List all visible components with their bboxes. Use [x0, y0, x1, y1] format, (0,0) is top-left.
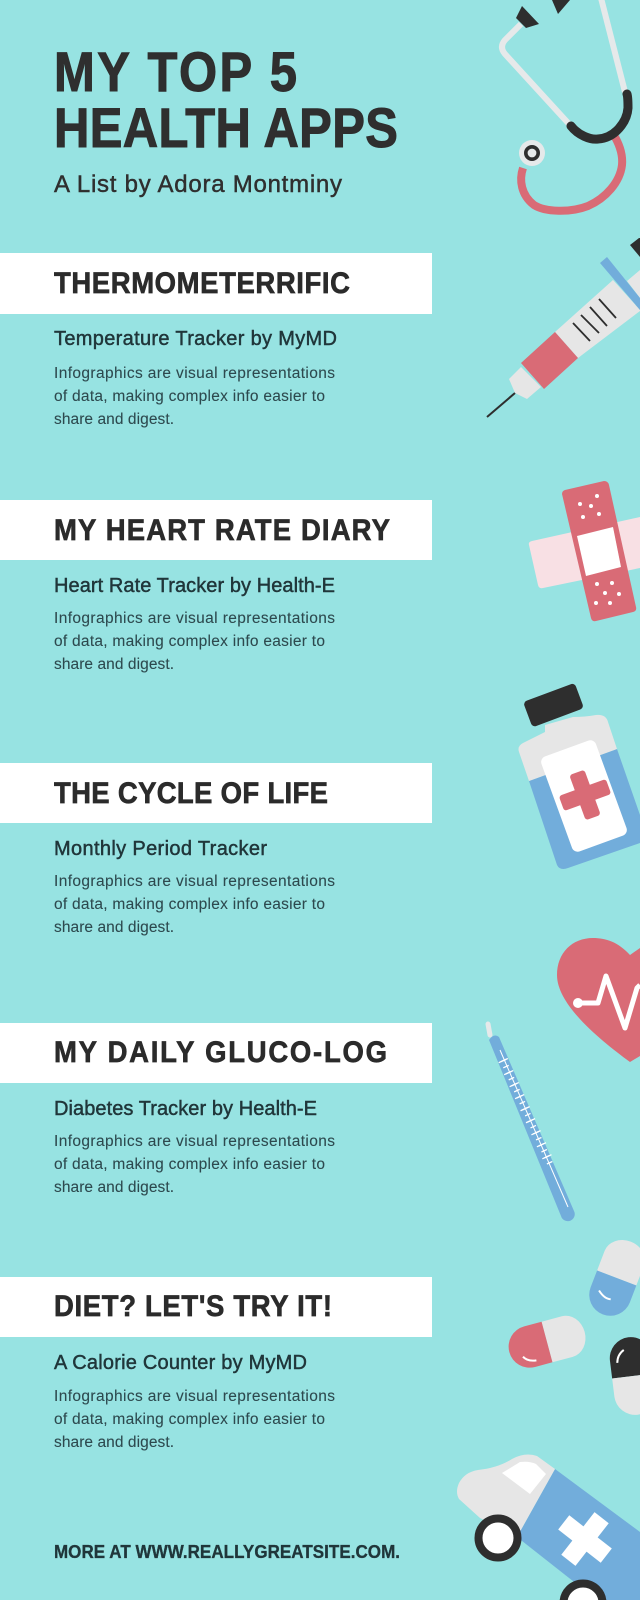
heading: Diet? Let's try it!: DIET? LET'S TRY IT!: [54, 1290, 332, 1323]
description: of data, making complex info easier to: [54, 896, 325, 913]
heading: The Cycle of Life: THE CYCLE OF LIFE: [54, 777, 328, 810]
description: share and digest.: [54, 411, 174, 428]
description: Infographics are visual representations: [54, 610, 335, 627]
icon: bandage: [529, 481, 640, 621]
description: Infographics are visual representations: [54, 873, 335, 890]
subtitle: A List by Adora Montminy: [54, 171, 342, 198]
description: of data, making complex info easier to: [54, 388, 325, 405]
description: of data, making complex info easier to: [54, 1156, 325, 1173]
icon: red pill: [504, 1312, 590, 1372]
icon: thermometer: [488, 1024, 575, 1221]
heading: Thermometerrific: THERMOMETERRIFIC: [54, 267, 350, 300]
panel: My Daily Gluco-Log: [0, 1023, 432, 1196]
description: share and digest.: [54, 919, 174, 936]
description: [54, 873, 335, 936]
title: [54, 42, 398, 160]
panel: My Heart Rate Diary: [0, 500, 432, 673]
title: HEALTH APPS: [54, 98, 398, 160]
icon: medicine bottle: [518, 683, 640, 869]
icon: blue pill: [583, 1234, 640, 1322]
icon: ambulance: [457, 1455, 640, 1600]
icon: syringe: [487, 238, 640, 417]
title: MY TOP 5: [54, 42, 297, 104]
panel: The Cycle of Life: [0, 763, 432, 936]
app subtitle: Diabetes Tracker: Diabetes Tracker by Health-E: [54, 1098, 317, 1120]
app subtitle: Monthly Period Tracker: Monthly Period Tracker: [54, 838, 267, 860]
description: [54, 1388, 335, 1451]
description: Infographics are visual representations: [54, 1388, 335, 1405]
footer link: MORE AT WWW.REALLYGREATSITE.COM.: [54, 1541, 400, 1562]
description: Infographics are visual representations: [54, 365, 335, 382]
description: share and digest.: [54, 1179, 174, 1196]
description: [54, 610, 335, 673]
description: [54, 1133, 335, 1196]
app subtitle: A Calorie Counter: A Calorie Counter by MyMD: [54, 1352, 307, 1374]
icon: heart: [557, 938, 640, 1062]
description: of data, making complex info easier to: [54, 633, 325, 650]
heading: My Heart Rate Diary: MY HEART RATE DIARY: [54, 514, 390, 547]
description: Infographics are visual representations: [54, 1133, 335, 1150]
description: share and digest.: [54, 656, 174, 673]
icon: black pill: [607, 1335, 640, 1417]
icon: stethoscope: [502, 0, 628, 211]
heading: My Daily Gluco-Log: MY DAILY GLUCO-LOG: [54, 1036, 387, 1069]
description: of data, making complex info easier to: [54, 1411, 325, 1428]
app subtitle: Temperature Tracker: Temperature Tracker by MyMD: [54, 328, 337, 350]
app subtitle: Heart Rate Tracker: Heart Rate Tracker by Health-E: [54, 575, 335, 597]
panel: Diet? Let's try it!: [0, 1277, 432, 1451]
panel: Thermometerrific: [0, 253, 432, 428]
description: [54, 365, 335, 428]
description: share and digest.: [54, 1434, 174, 1451]
